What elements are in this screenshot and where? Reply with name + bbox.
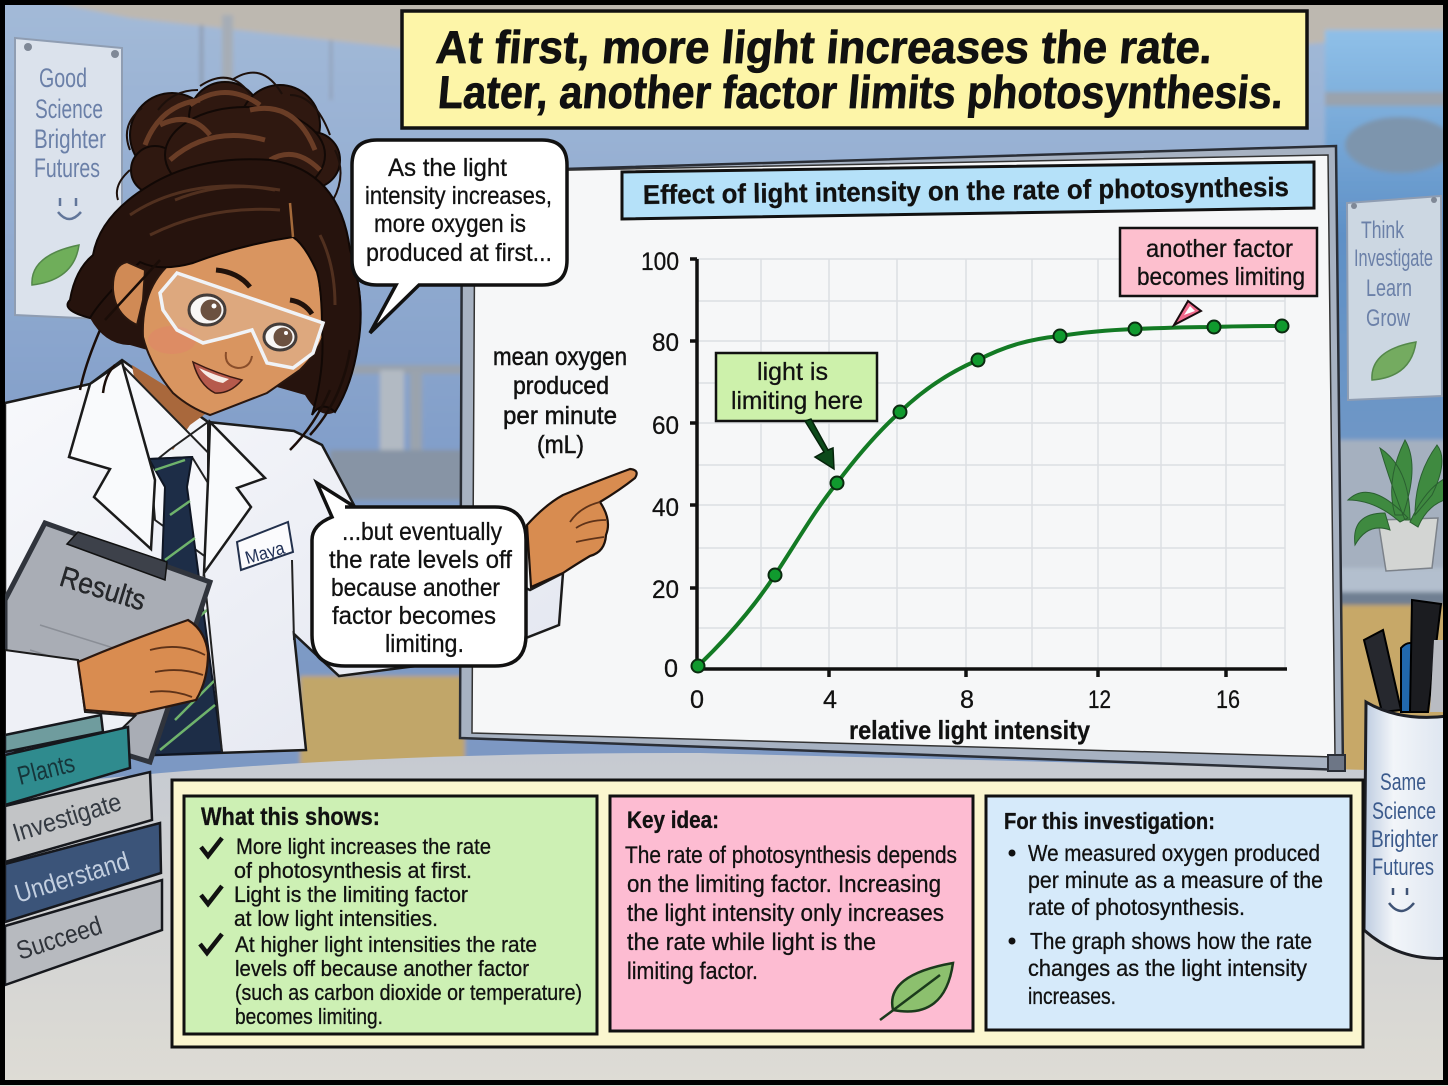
x axis tick labels: 0 <box>690 686 704 714</box>
panel: what this shows: levels off because another factor <box>235 956 529 981</box>
speech bubble: bottom: ...but eventually <box>342 518 502 546</box>
poster: Think Investigate Learn Grow: Think <box>1361 217 1405 244</box>
x axis tick labels: 8 <box>960 686 974 714</box>
y axis tick labels <box>641 248 679 683</box>
panel: what this shows: (such as carbon dioxide or temperature) <box>235 980 582 1005</box>
title banner <box>402 11 1307 128</box>
speech bubble: bottom: because another <box>331 574 500 602</box>
panel: for this investigation: The graph shows how the rate <box>1030 928 1312 954</box>
panel: key idea: the rate while light is the <box>627 929 876 956</box>
y axis title: produced <box>513 372 609 400</box>
lab coat <box>5 360 563 755</box>
ear <box>80 260 350 450</box>
y axis tick labels: 100 <box>641 248 679 276</box>
poster: Good Science Brighter Futures <box>15 38 122 320</box>
panel: for this investigation: We measured oxygen produced <box>1028 840 1320 866</box>
graph title: Effect of light intensity on the rate of photosynthesis <box>643 172 1289 210</box>
callout: light is limiting here: light is <box>757 358 828 386</box>
panel: for this investigation: rate of photosynthesis. <box>1028 894 1245 920</box>
sleeve hand and clipboard: Results <box>56 561 149 617</box>
pointing hand <box>527 469 637 587</box>
graph title <box>622 162 1314 219</box>
stack of books: Understand <box>11 846 133 909</box>
panel: for this investigation: increases. <box>1028 983 1116 1009</box>
x axis title: relative light intensity <box>849 715 1090 745</box>
x axis tick labels: 12 <box>1088 686 1111 714</box>
panel: what this shows: More light increases the rate <box>236 834 491 859</box>
panel: key idea: the light intensity only increases <box>627 900 944 927</box>
tie <box>149 457 222 755</box>
y axis tick labels: 60 <box>652 412 679 440</box>
y axis title: per minute <box>503 402 617 430</box>
stack of books: Succeed <box>13 910 106 966</box>
panel: key idea: The rate of photosynthesis depends <box>625 842 957 869</box>
axes <box>690 259 1287 677</box>
callout: another factor becomes limiting: becomes limiting <box>1137 263 1305 291</box>
y axis tick labels: 80 <box>652 329 679 357</box>
back hair <box>70 175 362 414</box>
panel: key idea <box>610 796 973 1031</box>
poster: Good Science Brighter Futures: Futures <box>34 153 100 183</box>
icon: leaf <box>880 963 953 1020</box>
stack of books: Investigate <box>9 786 125 848</box>
callout: another factor becomes limiting: another factor <box>1146 235 1293 263</box>
speech bubble: top: As the light <box>388 154 507 182</box>
front hair <box>68 159 361 415</box>
callout: light is limiting here: limiting here <box>731 387 863 415</box>
coat lapels <box>69 362 155 549</box>
speech bubble: bottom: factor becomes <box>332 602 496 630</box>
data points <box>692 320 1288 672</box>
line chart <box>641 248 1288 745</box>
speech bubble: bottom <box>312 483 526 666</box>
panel: what this shows: What this shows: <box>201 803 380 831</box>
y axis tick labels: 40 <box>652 494 679 522</box>
potted plant <box>1348 440 1448 571</box>
speech bubble: top <box>352 140 567 333</box>
panel: key idea: Key idea: <box>627 807 719 834</box>
panel: for this investigation: per minute as a measure of the <box>1028 867 1323 893</box>
panel: what this shows: At higher light intensities the rate <box>235 932 537 957</box>
grid <box>697 259 1285 668</box>
poster: Good Science Brighter Futures: Science <box>35 94 103 124</box>
speech bubble: bottom: the rate levels off <box>329 546 512 574</box>
shirt collar <box>122 365 235 560</box>
panel: what this shows: Light is the limiting factor <box>234 882 468 907</box>
panel: for this investigation: For this investigation: <box>1004 808 1215 834</box>
neck <box>132 365 208 450</box>
speech bubble: top: intensity increases, <box>365 182 552 210</box>
panel: key idea: limiting factor. <box>627 958 758 985</box>
stack of books: Plants <box>14 748 78 791</box>
y axis title: mean oxygen <box>493 343 627 371</box>
x axis tick labels: 4 <box>823 686 837 714</box>
whiteboard <box>460 146 1345 771</box>
y axis title: (mL) <box>537 431 584 459</box>
speech bubble: top: more oxygen is <box>374 210 526 238</box>
y axis tick labels: 20 <box>652 576 679 604</box>
stack of books <box>5 715 162 985</box>
name tag <box>237 522 293 570</box>
poster: Think Investigate Learn Grow: Learn <box>1366 275 1412 302</box>
panel: what this shows: at low light intensities. <box>234 906 438 931</box>
poster: Good Science Brighter Futures: Good <box>39 63 87 93</box>
callout: light is limiting here <box>716 353 877 469</box>
name tag: Maya <box>243 538 288 568</box>
y axis tick labels: 0 <box>664 655 678 683</box>
hair bun <box>117 73 341 203</box>
poster: Think Investigate Learn Grow: Grow <box>1366 305 1411 332</box>
panel: for this investigation <box>986 796 1351 1030</box>
poster: Good Science Brighter Futures: Brighter <box>34 124 106 154</box>
panel: for this investigation: changes as the light intensity <box>1028 955 1307 981</box>
pen cup: Same <box>1380 769 1426 796</box>
sleeve hand and clipboard <box>5 523 210 762</box>
speech bubble: top: produced at first... <box>366 239 552 267</box>
character: Maya pointing at the graph <box>5 73 637 762</box>
counter top <box>0 753 1448 1086</box>
title banner: At first, more light increases the rate. <box>434 21 1215 73</box>
panel: what this shows <box>184 796 597 1034</box>
callout: another factor becomes limiting <box>1120 228 1317 325</box>
panel: what this shows: of photosynthesis at first. <box>234 858 472 883</box>
poster: Think Investigate Learn Grow <box>1347 196 1442 400</box>
bottom information panel <box>172 780 1363 1047</box>
panel: key idea: on the limiting factor. Increasing <box>627 871 941 898</box>
pen cup <box>1364 600 1448 958</box>
face <box>143 232 325 415</box>
y axis title <box>493 343 627 459</box>
panel: what this shows: becomes limiting. <box>235 1004 383 1029</box>
speech bubble: bottom: limiting. <box>385 630 464 658</box>
safety goggles <box>160 273 323 368</box>
data curve <box>698 326 1282 666</box>
x axis tick labels <box>690 686 1240 714</box>
title banner: Later, another factor limits photosynthesis. <box>436 66 1286 118</box>
x axis tick labels: 16 <box>1216 686 1240 714</box>
